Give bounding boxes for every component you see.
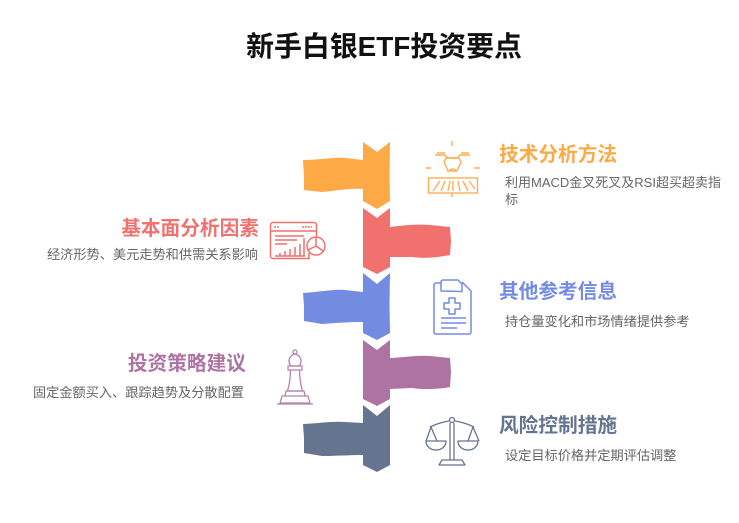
icon: drone over field (426, 141, 480, 197)
icon: chess pawn (277, 350, 313, 404)
arrow segment: purple (363, 340, 451, 406)
heading: 其他参考信息 (499, 280, 617, 303)
block: fundamental analysis (47, 217, 325, 262)
icon: dashboard with charts (270, 222, 325, 258)
heading: 投资策略建议 (128, 352, 246, 375)
description: 设定目标价格并定期评估调整 (505, 448, 676, 463)
arrow segment: red (363, 208, 451, 274)
block: technical analysis (426, 141, 721, 207)
block: strategy advice (33, 350, 313, 404)
heading: 基本面分析因素 (121, 217, 259, 240)
arrow segment: orange (303, 142, 390, 209)
block: risk control (426, 414, 676, 465)
description line 2: 标 (505, 192, 518, 207)
description: 经济形势、美元走势和供需关系影响 (47, 247, 258, 262)
description: 利用MACD金叉死叉及RSI超买超卖指 (505, 175, 721, 190)
block: other reference information (434, 280, 690, 334)
arrow segment: slate (303, 405, 390, 472)
heading: 技术分析方法 (499, 143, 617, 166)
arrow segment: blue (303, 273, 390, 340)
icon: clipboard document (434, 280, 471, 334)
icon: balance scale (426, 418, 479, 465)
description: 固定金额买入、跟踪趋势及分散配置 (33, 385, 244, 400)
title: 新手白银ETF投资要点 (246, 31, 522, 62)
heading: 风险控制措施 (499, 414, 617, 437)
description: 持仓量变化和市场情绪提供参考 (505, 313, 690, 329)
